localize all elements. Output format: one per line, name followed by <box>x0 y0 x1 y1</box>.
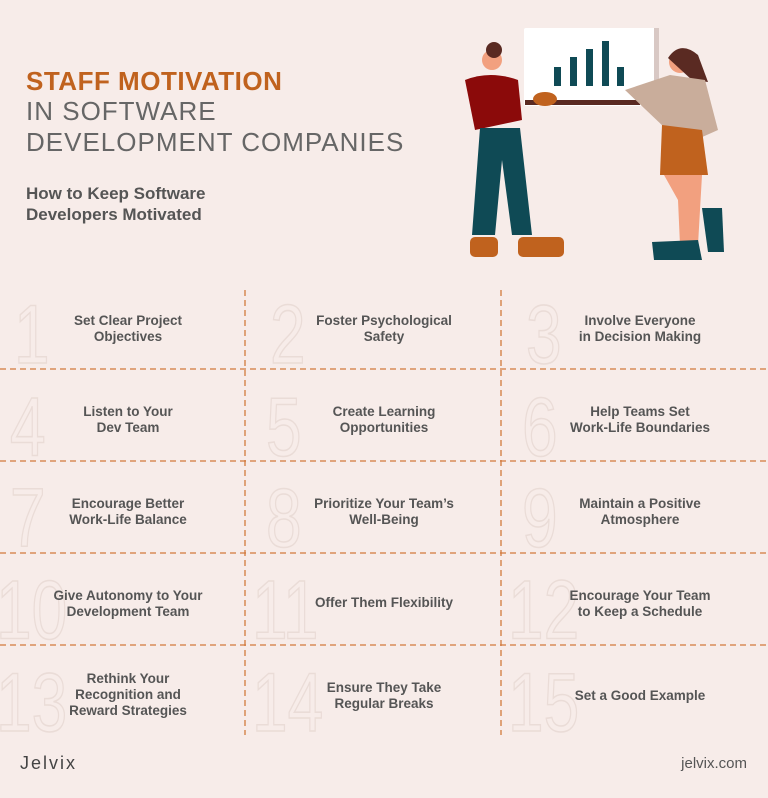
background numbers: 1 <box>14 288 50 381</box>
title: DEVELOPMENT COMPANIES <box>26 127 404 157</box>
text: Foster Psychological <box>316 313 452 328</box>
text: Ensure They Take <box>327 680 441 695</box>
text: Help Teams Set <box>590 404 690 419</box>
text: Offer Them Flexibility <box>315 595 453 610</box>
text: Create Learning <box>333 404 435 419</box>
text: Work-Life Balance <box>69 512 187 527</box>
text: Opportunities <box>340 420 428 435</box>
text: Listen to Your <box>83 404 173 419</box>
text: Work-Life Boundaries <box>570 420 710 435</box>
subtitle: How to Keep Software <box>26 184 205 203</box>
cell texts: Set Clear Project <box>74 313 182 328</box>
text: Encourage Your Team <box>569 588 711 603</box>
background numbers: 4 <box>10 380 46 473</box>
text: Dev Team <box>97 420 159 435</box>
grid dividers <box>0 290 766 735</box>
text: Maintain a Positive <box>579 496 701 511</box>
text: Give Autonomy to Your <box>53 588 202 603</box>
background numbers: 7 <box>10 471 46 564</box>
text: Atmosphere <box>601 512 679 527</box>
text: to Keep a Schedule <box>578 604 702 619</box>
text: Prioritize Your Team’s <box>314 496 454 511</box>
title: STAFF MOTIVATION <box>26 66 282 96</box>
background numbers: 5 <box>266 380 302 473</box>
background numbers: 2 <box>270 288 306 381</box>
footer logo: Jelvix <box>20 753 77 773</box>
subtitle: Developers Motivated <box>26 205 202 224</box>
background numbers: 11 <box>252 563 318 657</box>
text: Recognition and <box>75 687 181 702</box>
text: Reward Strategies <box>69 703 187 718</box>
illustration: two people with chart <box>465 28 724 260</box>
background numbers: 6 <box>522 380 558 473</box>
title <box>26 66 404 157</box>
title: IN SOFTWARE <box>26 96 217 126</box>
text: Encourage Better <box>72 496 184 511</box>
text: Regular Breaks <box>334 696 434 711</box>
text: Involve Everyone <box>584 313 696 328</box>
footer url: jelvix.com <box>681 755 747 772</box>
text: Set a Good Example <box>575 688 705 703</box>
text: Safety <box>364 329 404 344</box>
subtitle <box>26 184 205 224</box>
text: Well-Being <box>349 512 419 527</box>
background numbers: 12 <box>508 563 579 657</box>
text: Rethink Your <box>87 671 169 686</box>
background numbers <box>0 288 579 737</box>
background numbers: 9 <box>522 471 558 564</box>
cell texts <box>74 313 182 344</box>
background numbers: 3 <box>526 288 562 381</box>
text: Development Team <box>67 604 189 619</box>
text: in Decision Making <box>579 329 701 344</box>
background numbers: 8 <box>266 471 302 564</box>
cell texts: Objectives <box>94 329 162 344</box>
